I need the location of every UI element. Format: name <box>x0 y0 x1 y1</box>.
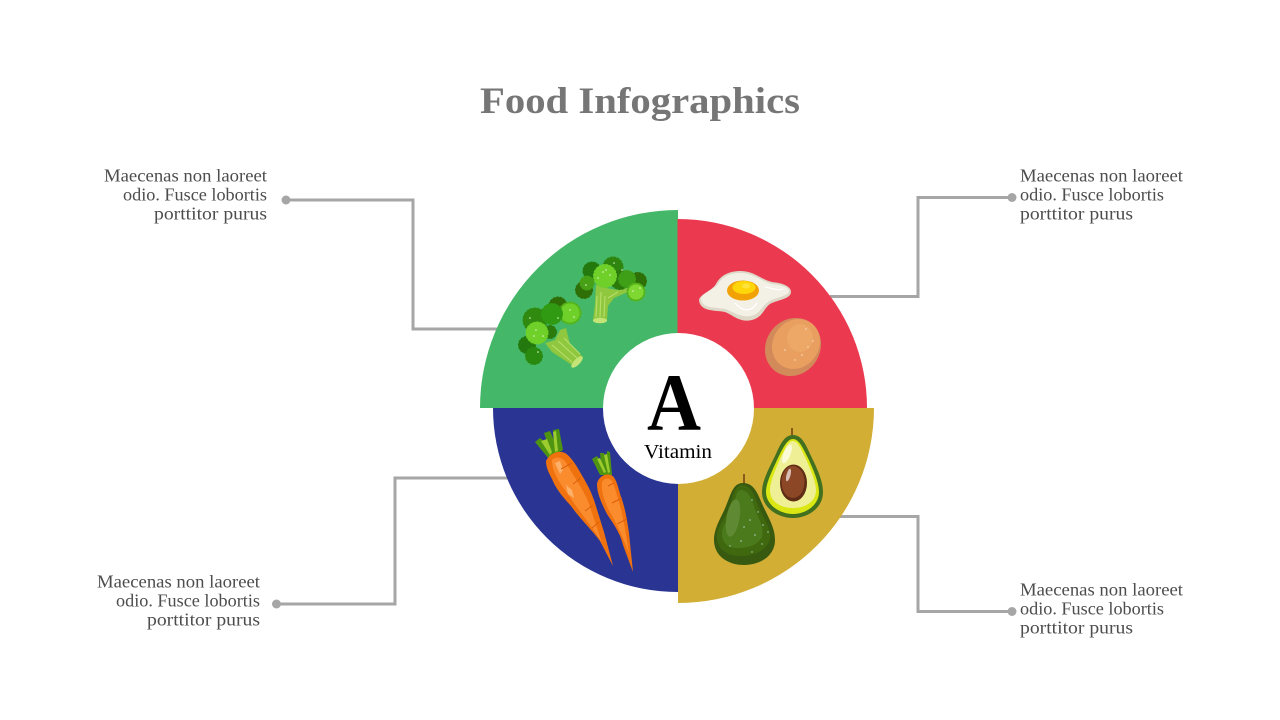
text block: bottom left: Maecenas non laoreet <box>97 572 260 592</box>
segment: red <box>678 219 867 408</box>
callout: bottom right <box>838 516 1183 638</box>
icon: carrots <box>535 429 633 572</box>
label: Vitamin: Vitamin <box>644 441 712 463</box>
connector: top right <box>830 193 1016 296</box>
center badge <box>603 333 754 484</box>
text block: bottom right: porttitor purus <box>1020 618 1133 638</box>
icon: whole avocado <box>714 474 775 565</box>
connector: top left <box>282 196 498 329</box>
icon: eggs <box>699 271 832 387</box>
callout: bottom left <box>97 478 509 630</box>
callout: top left <box>104 166 498 329</box>
icon: left carrot <box>535 429 613 566</box>
text block: top left: odio. Fusce lobortis <box>123 184 267 204</box>
icon: halved avocado <box>762 428 823 518</box>
text block: top right: porttitor purus <box>1020 204 1133 224</box>
segment: gold <box>678 408 874 603</box>
text block: top left: Maecenas non laoreet <box>104 166 267 186</box>
icon: lower broccoli <box>519 298 584 369</box>
icon: fried egg <box>699 271 791 321</box>
icon: broccoli <box>519 258 646 369</box>
text block: bottom left: odio. Fusce lobortis <box>116 590 260 610</box>
icon: avocados <box>714 428 823 565</box>
connector: bottom right <box>838 516 1016 616</box>
icon: brown egg <box>754 307 832 387</box>
letter A: A <box>647 357 701 448</box>
text block: top left: porttitor purus <box>154 204 267 224</box>
title: Food Infographics <box>480 81 800 122</box>
text block: bottom right: odio. Fusce lobortis <box>1020 598 1164 618</box>
icon: upper broccoli <box>576 258 646 323</box>
segment: green <box>480 210 678 408</box>
text block: top right: Maecenas non laoreet <box>1020 166 1183 186</box>
text block: bottom left: porttitor purus <box>147 610 260 630</box>
connector: bottom left <box>272 478 509 608</box>
text block: bottom right: Maecenas non laoreet <box>1020 580 1183 600</box>
callout: top right <box>830 166 1183 296</box>
segment: blue <box>493 408 678 592</box>
icon: right carrot <box>592 451 633 572</box>
pie chart <box>480 210 874 603</box>
text block: top right: odio. Fusce lobortis <box>1020 184 1164 204</box>
center circle <box>603 333 754 484</box>
